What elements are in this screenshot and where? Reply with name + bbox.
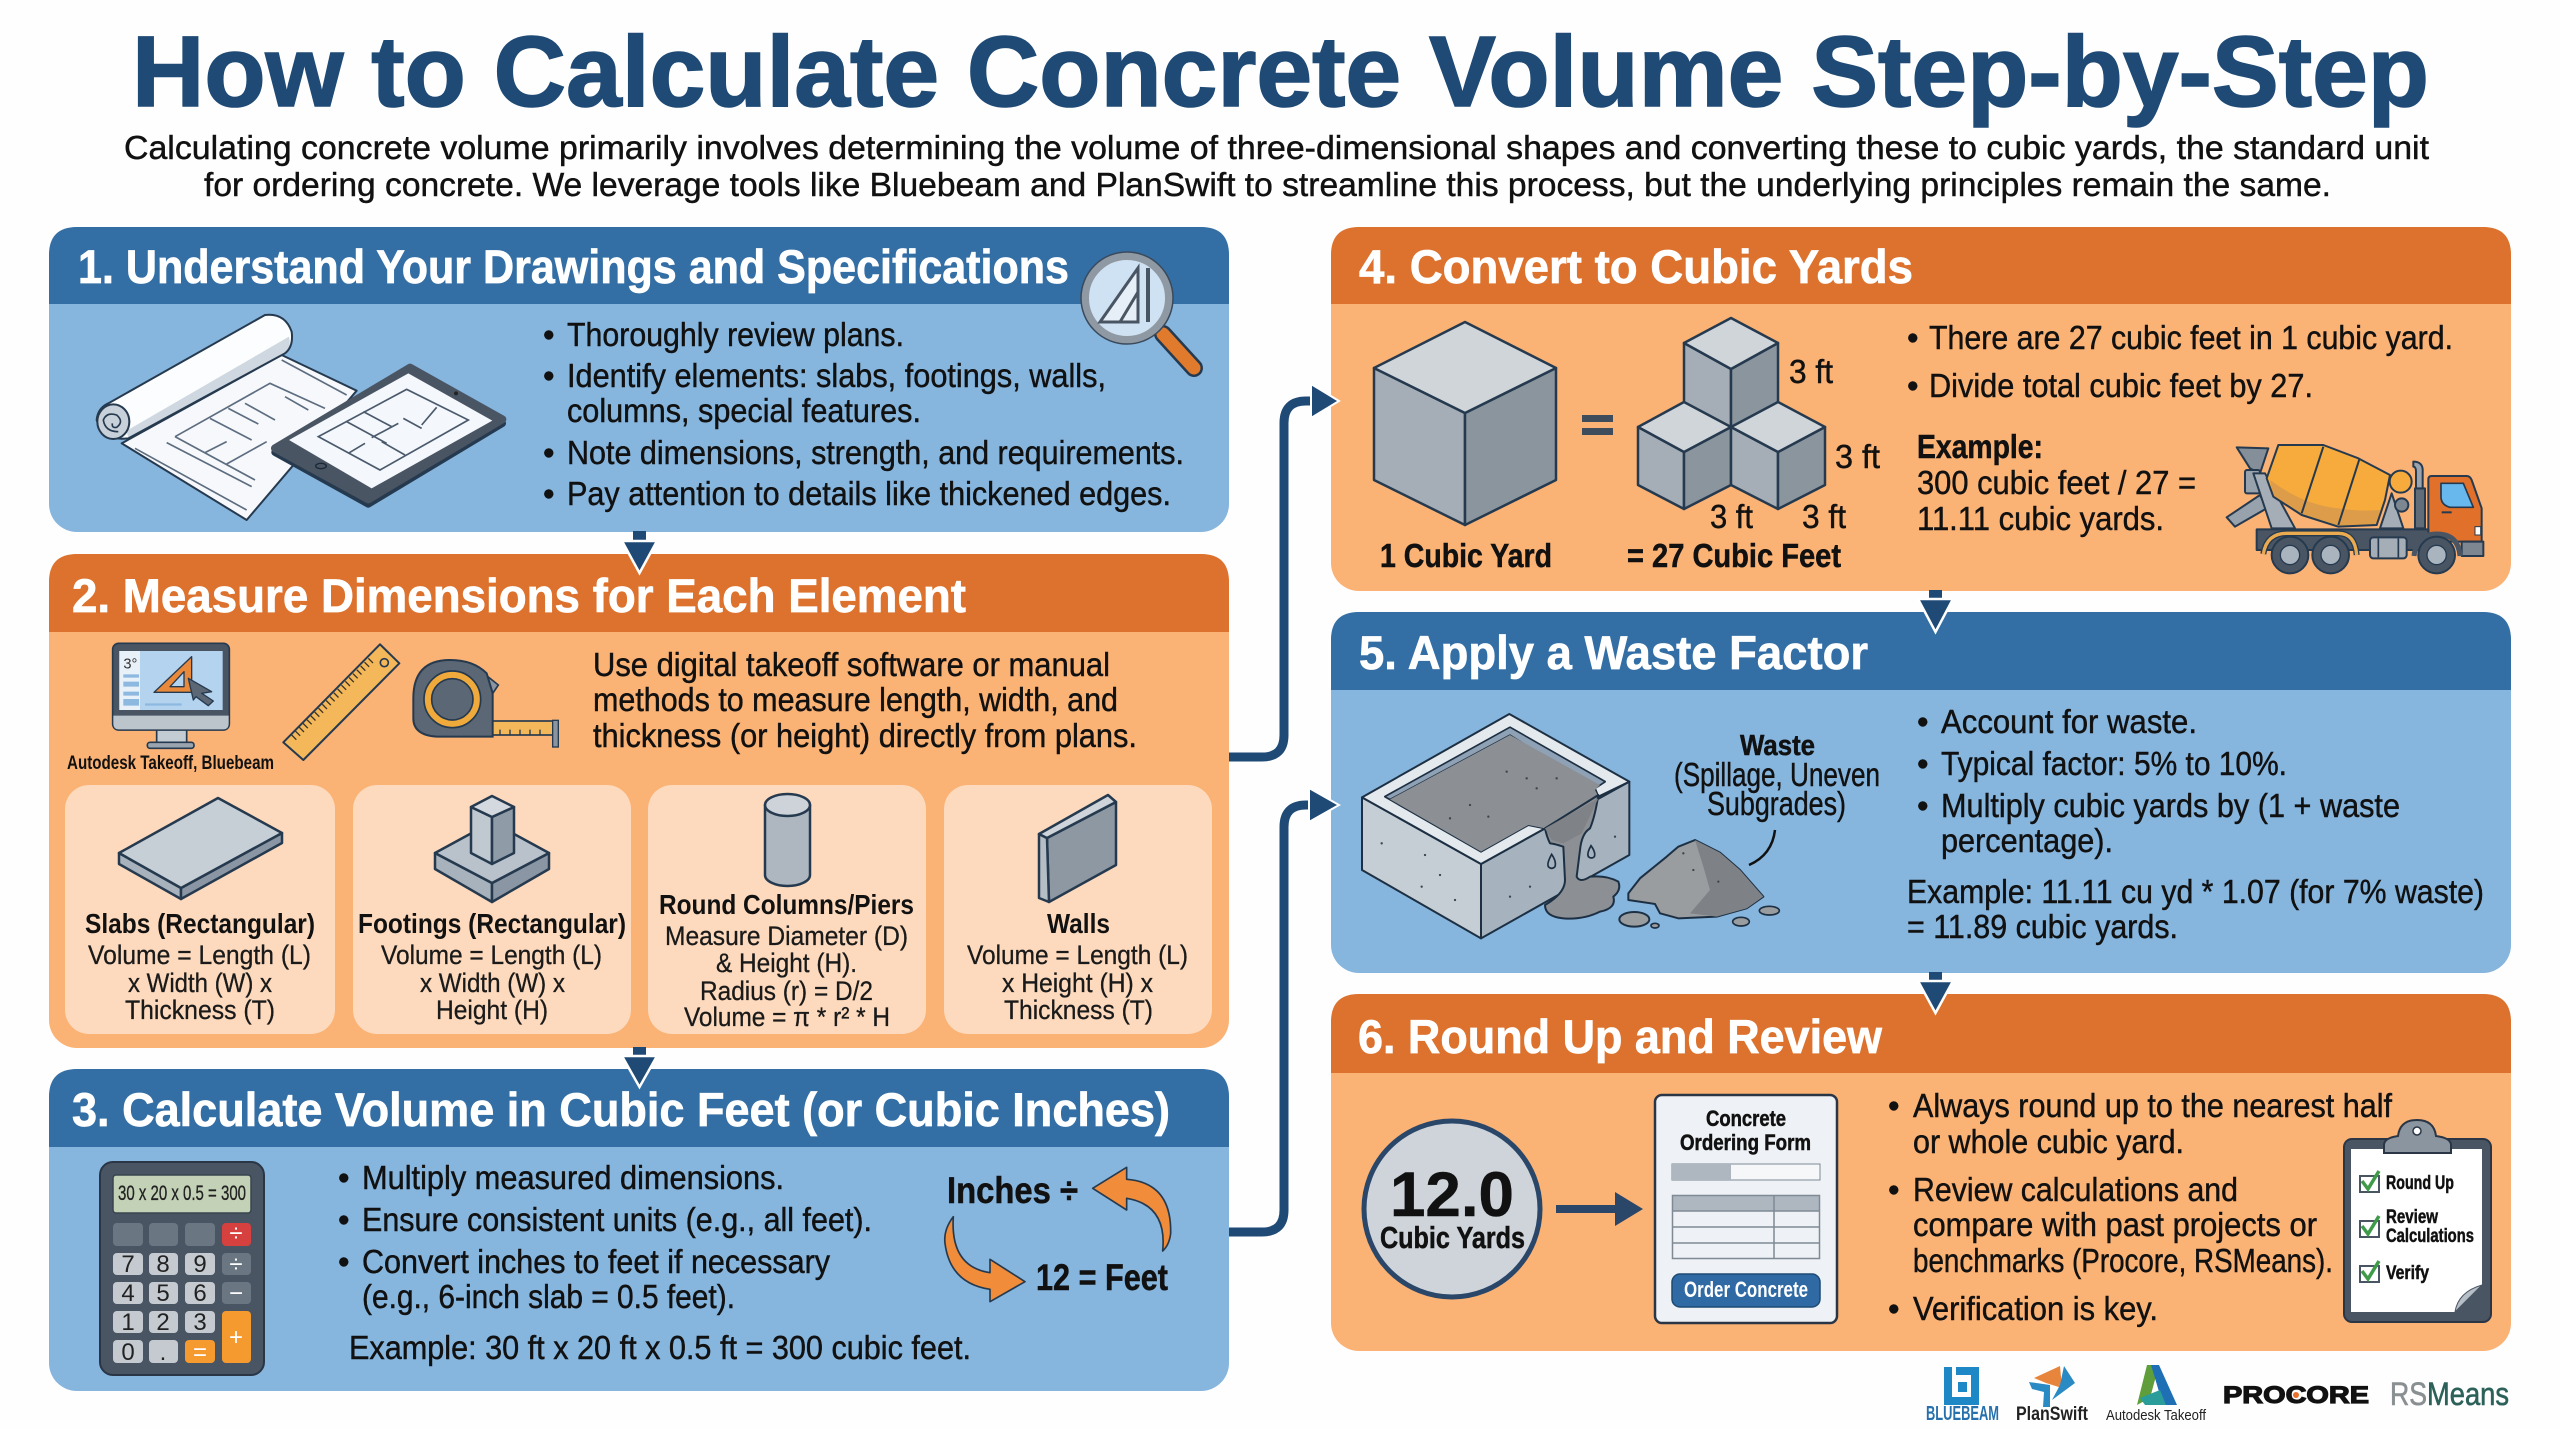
step 1 bullets: • bbox=[543, 475, 555, 512]
step 3 bullets: • bbox=[338, 1243, 350, 1280]
step 5 header: 5. Apply a Waste Factor bbox=[1359, 626, 1868, 679]
step 6 header bbox=[1331, 994, 2511, 1073]
card: slabs bbox=[65, 785, 335, 1034]
step 4 bullets: • bbox=[1907, 367, 1919, 404]
step 4 bullets bbox=[1907, 319, 2453, 404]
equals sign bbox=[1582, 415, 1613, 435]
card: walls: Thickness (T) bbox=[1004, 995, 1153, 1025]
icon: calculator: ÷ bbox=[229, 1220, 243, 1247]
icon: wall bbox=[1039, 795, 1116, 902]
step 1 bullets: Identify elements: slabs, footings, walls, bbox=[567, 357, 1106, 394]
icon: cylinder bbox=[765, 794, 810, 886]
step 3 bullets: (e.g., 6-inch slab = 0.5 feet). bbox=[362, 1278, 735, 1315]
step 3 bullets: Ensure consistent units (e.g., all feet). bbox=[362, 1201, 872, 1238]
arrow: step 5 to step 6 bbox=[1918, 972, 1953, 1013]
card: slabs: x Width (W) x bbox=[128, 968, 272, 998]
cube captions: = 27 Cubic Feet bbox=[1627, 537, 1841, 574]
icon: calculator: 3 bbox=[193, 1309, 207, 1336]
step 2 description: Use digital takeoff software or manual bbox=[593, 646, 1110, 683]
step 6 bullets: compare with past projects or bbox=[1913, 1206, 2317, 1243]
icon: calculator: − bbox=[229, 1280, 243, 1307]
card: round columns: Round Columns/Piers bbox=[659, 889, 914, 920]
logo: RSMeans: RS bbox=[2390, 1376, 2427, 1412]
card: round columns bbox=[648, 785, 926, 1034]
logo: Autodesk Takeoff bbox=[2106, 1365, 2207, 1424]
step 4 example: 300 cubic feet / 27 = bbox=[1917, 464, 2196, 501]
step 6 bullets: benchmarks (Procore, RSMeans). bbox=[1913, 1242, 2333, 1279]
dimension labels bbox=[1710, 353, 1880, 535]
icon: calculator: ÷ bbox=[229, 1251, 243, 1278]
step 5 bullets: • bbox=[1917, 745, 1929, 782]
step 6 bullets: • bbox=[1888, 1290, 1900, 1327]
step 3 header: 3. Calculate Volume in Cubic Feet (or Cubic Inches) bbox=[72, 1083, 1170, 1136]
logo: RSMeans bbox=[2390, 1376, 2509, 1412]
step 5 example bbox=[1907, 873, 2484, 945]
card: round columns: Radius (r) = D/2 bbox=[700, 976, 873, 1006]
cube captions: 1 Cubic Yard bbox=[1380, 537, 1552, 574]
step 6 header: 6. Round Up and Review bbox=[1358, 1010, 1882, 1063]
card: footings: Height (H) bbox=[436, 995, 548, 1025]
logo: Bluebeam bbox=[1926, 1367, 1999, 1425]
step 5 bullets: Account for waste. bbox=[1941, 703, 2197, 740]
step 1 bullets: Note dimensions, strength, and requirements. bbox=[567, 434, 1184, 471]
icon: calculator: 7 bbox=[121, 1251, 135, 1278]
icon: calculator: 5 bbox=[156, 1280, 170, 1307]
step 2 description: methods to measure length, width, and bbox=[593, 681, 1118, 718]
waste label: (Spillage, Uneven bbox=[1674, 756, 1880, 793]
dimension labels: 3 ft bbox=[1802, 498, 1846, 535]
icon: review clipboard: Verify bbox=[2386, 1263, 2429, 1284]
step 2 description bbox=[593, 646, 1137, 754]
ordering form: Order Concrete bbox=[1684, 1277, 1808, 1302]
ordering form: Concrete bbox=[1706, 1106, 1786, 1131]
arrow: step 4 to step 5 bbox=[1918, 590, 1953, 632]
step 1 bullets: Pay attention to details like thickened edges. bbox=[567, 475, 1171, 512]
step 5 example: Example: 11.11 cu yd * 1.07 (for 7% waste) bbox=[1907, 873, 2484, 910]
step 3 bullets: Multiply measured dimensions. bbox=[362, 1159, 784, 1196]
panel: step 5 waste factor bbox=[1331, 612, 2511, 973]
card: round columns: & Height (H). bbox=[716, 948, 857, 978]
card: walls: Volume = Length (L) bbox=[967, 940, 1188, 970]
arrow: curved up bbox=[1093, 1167, 1171, 1251]
icon: monitor: 3° bbox=[123, 656, 137, 672]
icon: calculator: 4 bbox=[121, 1280, 135, 1307]
icon: calculator: 30 x 20 x 0.5 = 300 bbox=[118, 1182, 246, 1205]
waste label: Waste bbox=[1740, 730, 1815, 762]
arrow: step 1 to step 2 bbox=[622, 531, 657, 573]
card: walls: Walls bbox=[1047, 908, 1110, 939]
panel: step 3 calculate volume bbox=[49, 1069, 1229, 1391]
panel: step 1 understand drawings bbox=[49, 227, 1229, 532]
card: round columns: Measure Diameter (D) bbox=[665, 921, 908, 951]
card: footings bbox=[353, 785, 631, 1034]
connector: step 3 to step 5 bbox=[1229, 788, 1339, 1232]
icon: calculator: = bbox=[193, 1339, 207, 1366]
step 3 bullets: Convert inches to feet if necessary bbox=[362, 1243, 830, 1280]
arrow to form bbox=[1556, 1192, 1643, 1226]
intro text bbox=[124, 129, 2429, 203]
icon: review clipboard: Review bbox=[2386, 1207, 2438, 1228]
step 4 example: Example: bbox=[1917, 428, 2043, 465]
card: slabs: Thickness (T) bbox=[125, 995, 275, 1025]
icon: formwork with spilled concrete bbox=[1362, 714, 1779, 938]
icon: review clipboard: Round Up bbox=[2386, 1173, 2454, 1194]
card: footings: Volume = Length (L) bbox=[381, 940, 602, 970]
icon: ruler bbox=[283, 644, 399, 760]
step 4 header bbox=[1331, 227, 2511, 304]
step 4 bullets: • bbox=[1907, 319, 1919, 356]
arrow: step 2 to step 3 bbox=[622, 1047, 657, 1087]
ordering form bbox=[1655, 1095, 1837, 1323]
step 3 example: Example: 30 ft x 20 ft x 0.5 ft = 300 cubic feet. bbox=[349, 1329, 971, 1366]
step 4 example bbox=[1917, 428, 2196, 537]
step 5 bullets: Typical factor: 5% to 10%. bbox=[1941, 745, 2287, 782]
icon: review clipboard bbox=[2344, 1120, 2491, 1322]
step 1 header bbox=[49, 227, 1229, 304]
step 3 bullets: • bbox=[338, 1201, 350, 1238]
icon: magnifier bbox=[1081, 252, 1194, 368]
panel: step 6 round up and review bbox=[1331, 994, 2511, 1351]
icon: concrete mixer truck bbox=[2227, 445, 2483, 573]
step 4 example: 11.11 cubic yards. bbox=[1917, 500, 2164, 537]
icon: calculator bbox=[100, 1162, 264, 1375]
icon: calculator: 0 bbox=[121, 1339, 135, 1366]
badge: 12.0 cubic yards: Cubic Yards bbox=[1380, 1220, 1525, 1255]
step 6 bullets: Review calculations and bbox=[1913, 1171, 2238, 1208]
logo: PlanSwift: PlanSwift bbox=[2016, 1404, 2089, 1425]
step 3 bullets: • bbox=[338, 1159, 350, 1196]
icon: footing bbox=[435, 796, 549, 902]
step 5 header bbox=[1331, 612, 2511, 690]
icon: slab bbox=[119, 798, 282, 899]
cube captions bbox=[1380, 537, 1841, 574]
step 1 bullets: • bbox=[543, 316, 555, 353]
panel: step 4 convert to cubic yards bbox=[1331, 227, 2511, 591]
step 6 bullets: • bbox=[1888, 1087, 1900, 1124]
step 5 example: = 11.89 cubic yards. bbox=[1907, 908, 2178, 945]
badge: 12.0 cubic yards bbox=[1364, 1121, 1540, 1297]
inches to feet cycle: Inches ÷ bbox=[947, 1170, 1078, 1211]
icon: calculator: 9 bbox=[193, 1251, 207, 1278]
card: slabs: Slabs (Rectangular) bbox=[85, 908, 315, 939]
icon: tape measure bbox=[413, 660, 558, 747]
intro text: Calculating concrete volume primarily involves determining the volume of three-dimensional shapes and converting these to cubic yards, the standard unit bbox=[124, 129, 2429, 166]
inches to feet cycle bbox=[945, 1167, 1171, 1302]
inches to feet cycle: 12 = Feet bbox=[1036, 1257, 1168, 1298]
logos row bbox=[1926, 1365, 2509, 1425]
step 1 bullets: columns, special features. bbox=[567, 392, 921, 429]
icon: calculator: 2 bbox=[156, 1309, 170, 1336]
step 1 bullets: • bbox=[543, 357, 555, 394]
step 4 bullets: Divide total cubic feet by 27. bbox=[1929, 367, 2313, 404]
step 6 bullets bbox=[1888, 1087, 2393, 1327]
badge: 12.0 cubic yards: 12.0 bbox=[1390, 1160, 1514, 1230]
step 4 bullets: There are 27 cubic feet in 1 cubic yard. bbox=[1929, 319, 2453, 356]
dimension labels: 3 ft bbox=[1789, 353, 1833, 390]
icon: monitor bbox=[113, 643, 229, 748]
logo: Bluebeam: BLUEBEAM bbox=[1926, 1403, 1999, 1425]
step 1 bullets: Thoroughly review plans. bbox=[567, 316, 904, 353]
step 6 bullets: Verification is key. bbox=[1913, 1290, 2158, 1327]
monitor caption: Autodesk Takeoff, Bluebeam bbox=[67, 753, 274, 774]
step 6 bullets: or whole cubic yard. bbox=[1913, 1123, 2184, 1160]
card: slabs: Volume = Length (L) bbox=[88, 940, 311, 970]
dimension labels: 3 ft bbox=[1835, 438, 1880, 475]
icon: big cube bbox=[1374, 322, 1556, 525]
step 1 bullets: • bbox=[543, 434, 555, 471]
step 5 bullets: percentage). bbox=[1941, 822, 2113, 859]
panel: step 2 measure dimensions bbox=[49, 554, 1229, 1048]
step 3 bullets bbox=[338, 1159, 872, 1315]
step 6 bullets: Always round up to the nearest half bbox=[1913, 1087, 2393, 1124]
icon: review clipboard: Calculations bbox=[2386, 1226, 2474, 1247]
icon: calculator: . bbox=[160, 1339, 166, 1366]
step 2 header: 2. Measure Dimensions for Each Element bbox=[72, 569, 966, 622]
waste label bbox=[1674, 730, 1880, 865]
ordering form: Ordering Form bbox=[1680, 1130, 1811, 1155]
icon: calculator: + bbox=[229, 1324, 243, 1351]
logo: Autodesk Takeoff: Autodesk Takeoff bbox=[2106, 1407, 2207, 1424]
logo: PlanSwift bbox=[2016, 1366, 2089, 1425]
card: footings: Footings (Rectangular) bbox=[358, 908, 626, 939]
step 1 bullets bbox=[543, 316, 1184, 512]
logo: Procore: PROCORE bbox=[2223, 1382, 2369, 1409]
card: round columns: Volume = π * r² * H bbox=[684, 1002, 890, 1032]
step 5 bullets: • bbox=[1917, 703, 1929, 740]
card: walls bbox=[944, 785, 1212, 1034]
step 2 header bbox=[49, 554, 1229, 632]
icon: calculator: 8 bbox=[156, 1251, 170, 1278]
step 5 bullets: • bbox=[1917, 787, 1929, 824]
icon: stacked cubes bbox=[1638, 318, 1825, 509]
step 5 bullets: Multiply cubic yards by (1 + waste bbox=[1941, 787, 2400, 824]
step 1 header: 1. Understand Your Drawings and Specifications bbox=[78, 240, 1069, 293]
connector: step 2 to step 4 bbox=[1229, 384, 1339, 757]
card: footings: x Width (W) x bbox=[420, 968, 565, 998]
step 2 description: thickness (or height) directly from plans. bbox=[593, 717, 1137, 754]
icon: calculator: 6 bbox=[193, 1280, 207, 1307]
icon: blueprint and tablet bbox=[97, 315, 502, 520]
step 3 header bbox=[49, 1069, 1229, 1147]
intro text: for ordering concrete. We leverage tools like Bluebeam and PlanSwift to streamline this process, but the underlying principles remain the same. bbox=[204, 166, 2331, 203]
dimension labels: 3 ft bbox=[1710, 498, 1753, 535]
card: walls: x Height (H) x bbox=[1002, 968, 1153, 998]
icon: calculator: 1 bbox=[121, 1309, 135, 1336]
step 6 bullets: • bbox=[1888, 1171, 1900, 1208]
waste label: Subgrades) bbox=[1707, 785, 1846, 822]
step 4 header: 4. Convert to Cubic Yards bbox=[1359, 240, 1913, 293]
logo: RSMeans: Means bbox=[2427, 1376, 2509, 1412]
step 5 bullets bbox=[1917, 703, 2400, 859]
arrow: curved down bbox=[945, 1217, 1025, 1302]
title: How to Calculate Concrete Volume Step-by-Step bbox=[132, 16, 2429, 128]
